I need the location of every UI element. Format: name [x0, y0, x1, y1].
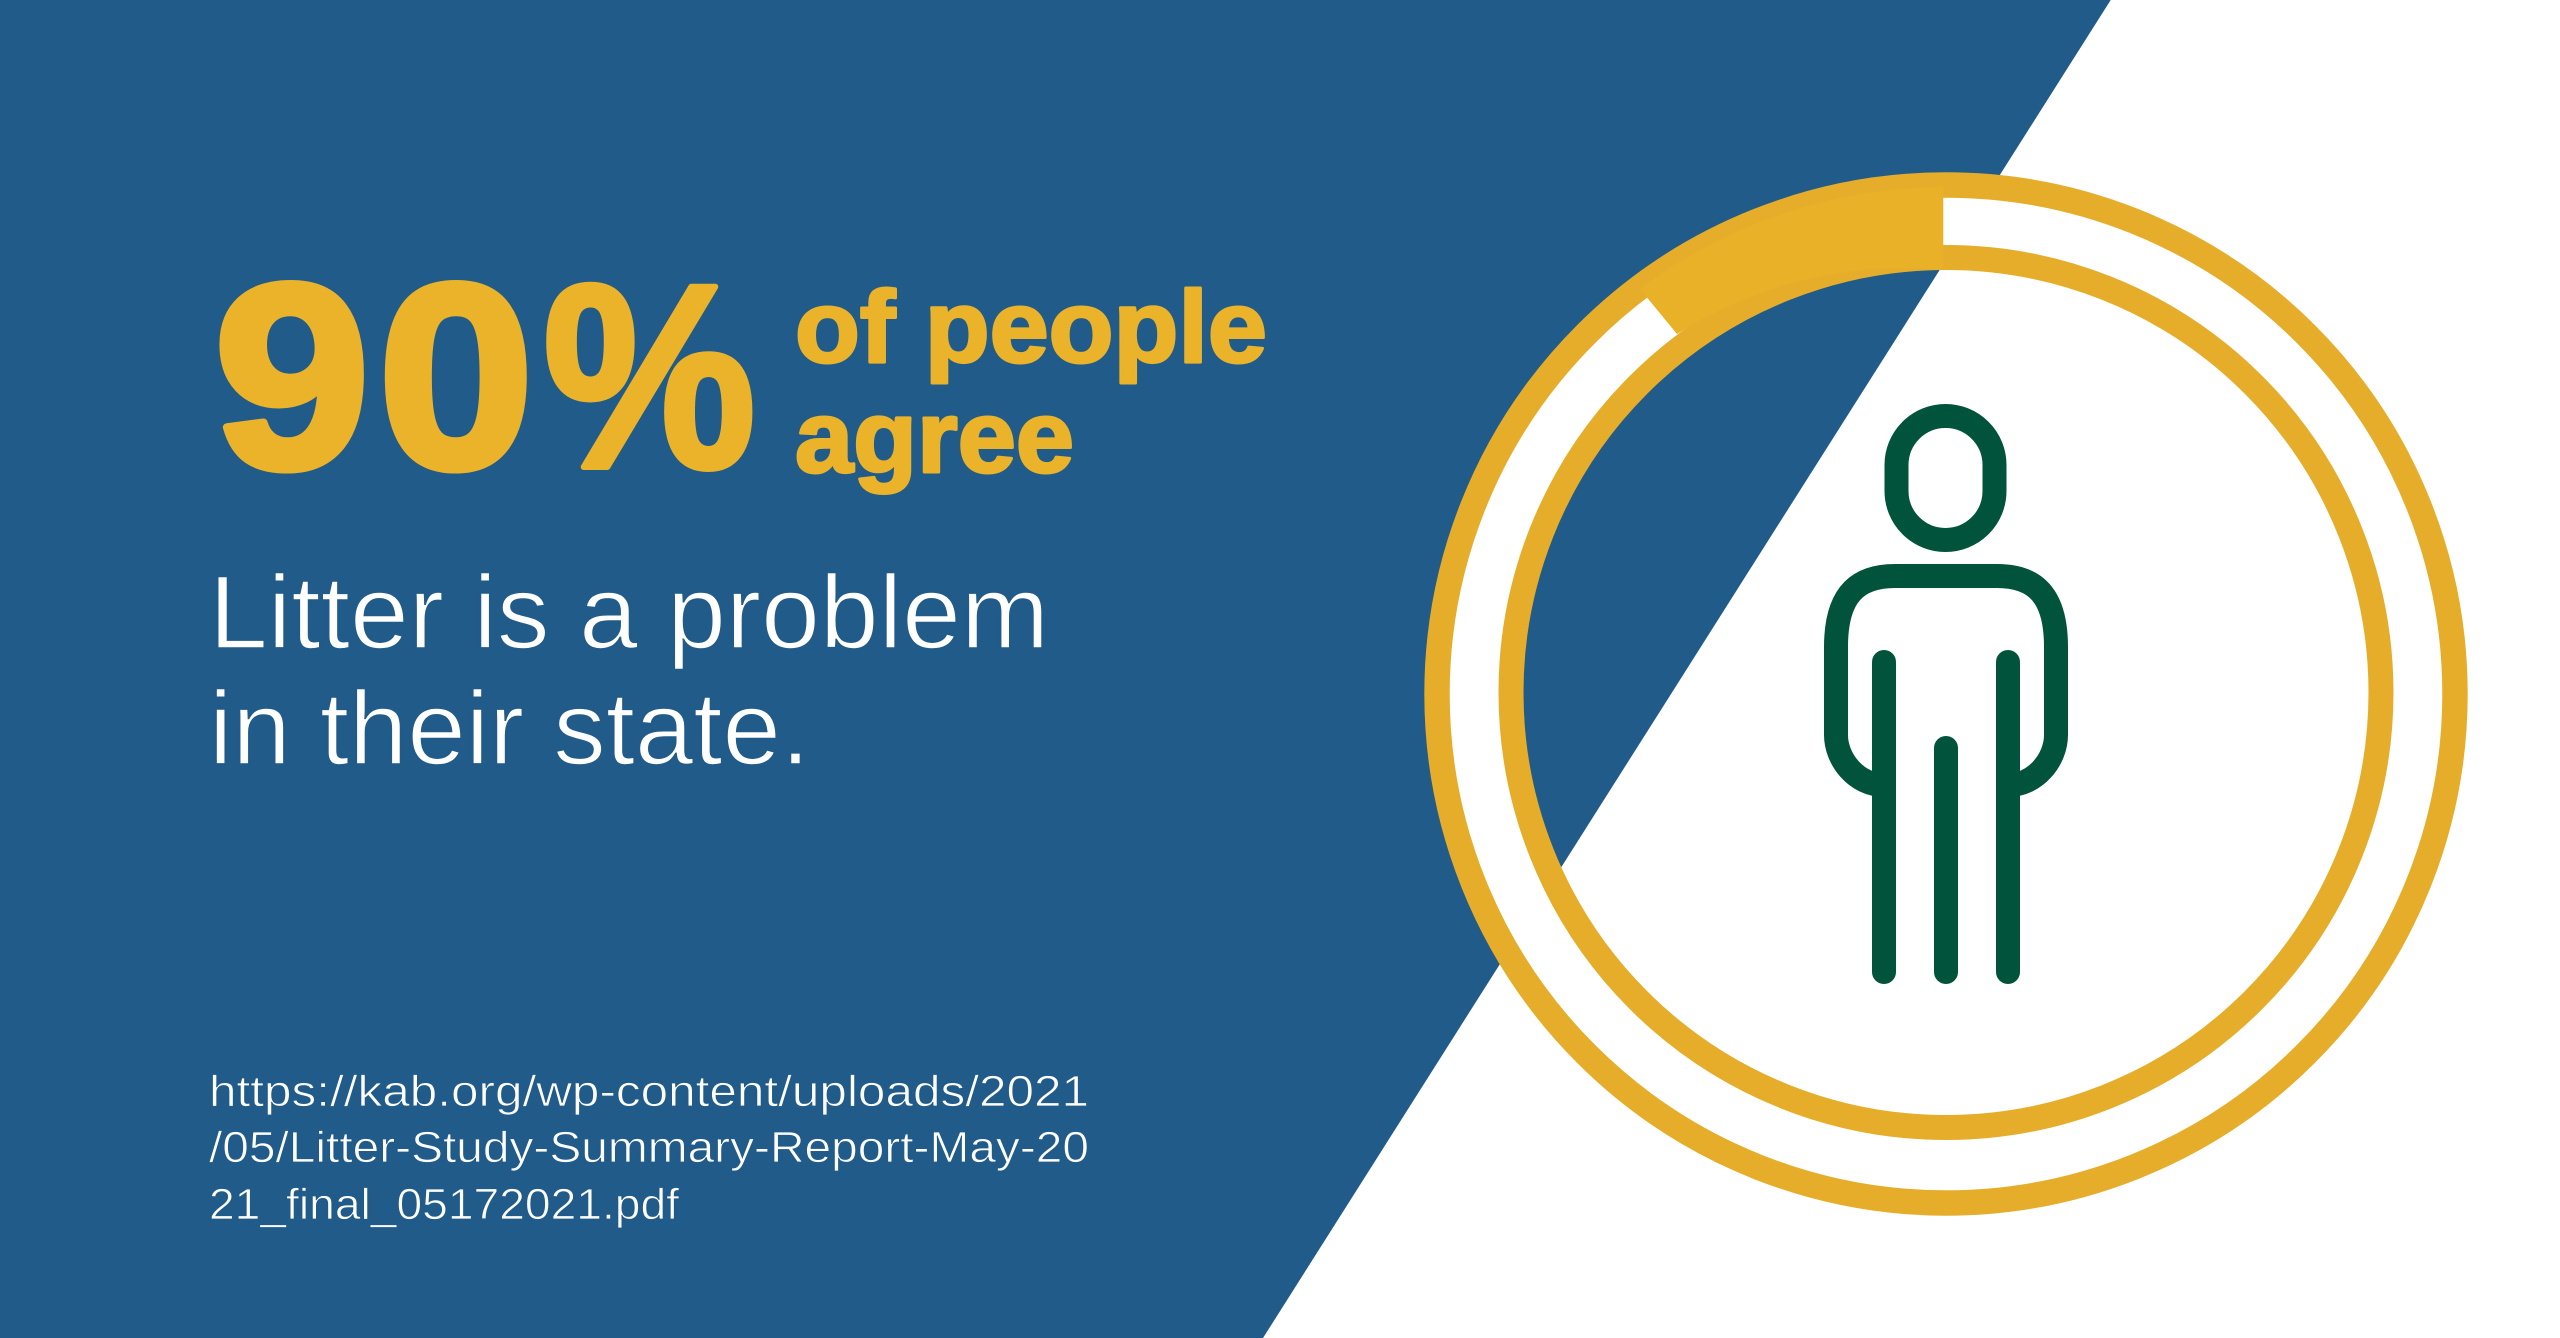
outer gold ring	[1437, 185, 2455, 1203]
statement line 1: Litter is a problem	[209, 555, 1049, 671]
centre leg line	[1934, 748, 1958, 972]
chart: 90 percent donut ring	[1437, 185, 2455, 1203]
statistic heading: 90% of people agree	[214, 230, 1267, 523]
heading line 1: of people	[795, 270, 1267, 384]
big number digit 0: 0	[378, 230, 534, 523]
right leg line	[1996, 662, 2020, 972]
icon: person	[1836, 416, 2056, 972]
inner gold ring	[1511, 258, 2381, 1128]
statement line 2: in their state.	[209, 671, 810, 787]
big number percent sign: %	[543, 230, 756, 523]
source line 1: https://kab.org/wp-content/uploads/2021	[209, 1067, 1089, 1116]
highlighted 10 percent wedge	[1640, 187, 1943, 334]
person body and arms	[1836, 576, 2056, 785]
source line 2: /05/Litter-Study-Summary-Report-May-20	[209, 1123, 1089, 1172]
heading line 2: agree	[795, 380, 1074, 494]
statement text	[209, 555, 1049, 787]
left leg line	[1872, 662, 1896, 972]
source URL	[209, 1067, 1089, 1229]
white ring band	[1481, 228, 2411, 1158]
person head	[1896, 416, 1994, 540]
source line 3: 21_final_05172021.pdf	[209, 1180, 680, 1229]
big number digit 9: 9	[214, 230, 370, 523]
